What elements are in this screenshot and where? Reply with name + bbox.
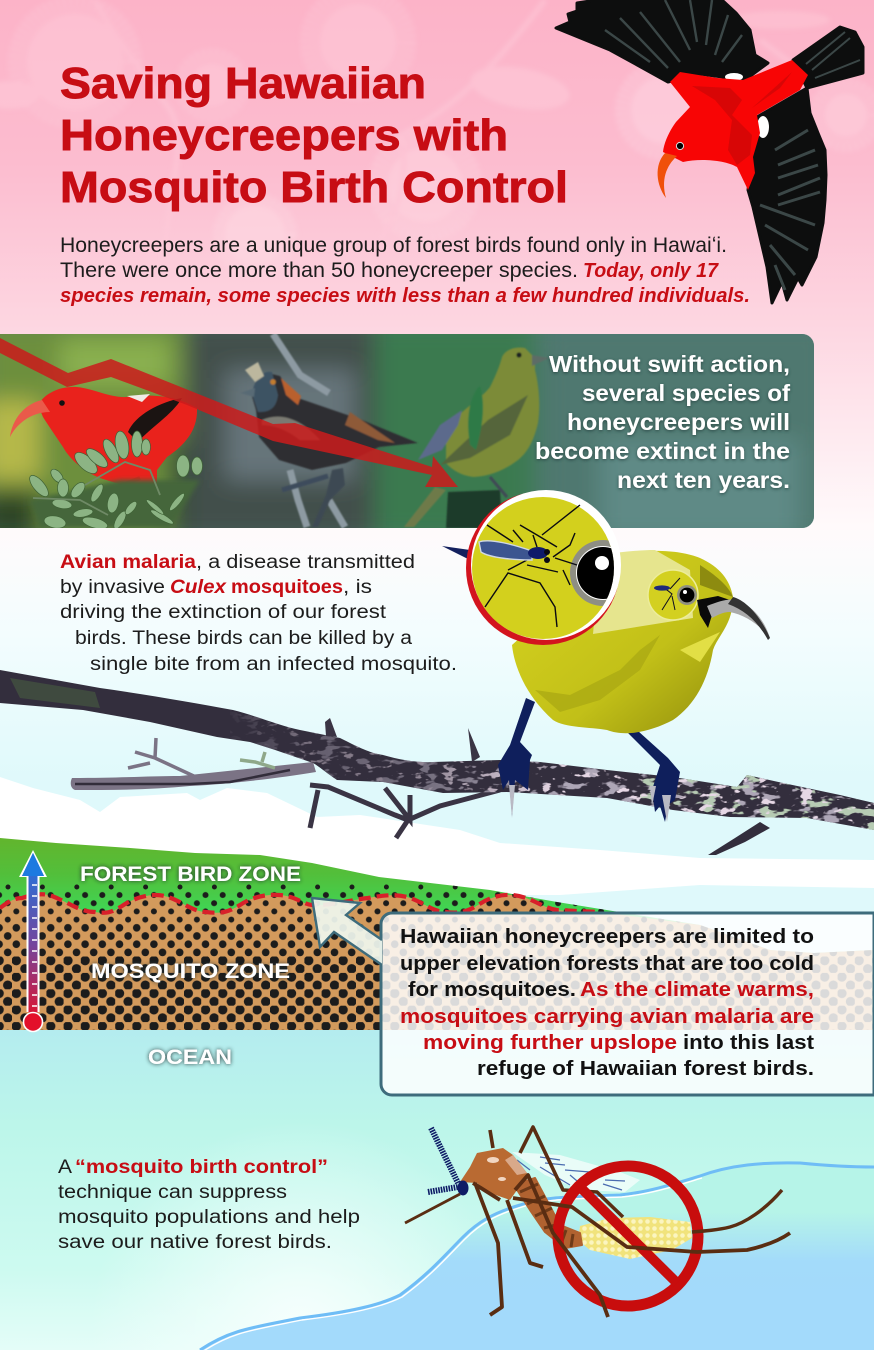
avian malaria text: , a disease transmitted <box>196 552 415 573</box>
avian malaria text <box>60 552 457 675</box>
photo panel: three honeycreepers with declining arrow <box>0 334 814 528</box>
photo: dark bird <box>240 362 418 527</box>
tail <box>442 546 470 560</box>
lower wing <box>748 88 826 303</box>
ocean <box>0 1030 874 1350</box>
abdomen <box>514 1178 582 1248</box>
red body <box>663 60 808 190</box>
head <box>458 1180 468 1196</box>
body <box>512 551 733 733</box>
feather shading <box>535 635 660 712</box>
deep water with wave line <box>200 1163 874 1350</box>
intro paragraph: Today, only 17 <box>583 260 719 282</box>
title <box>60 59 568 212</box>
panel text: extinction warning: Without swift action, <box>549 351 790 377</box>
avian malaria text: mosquitoes <box>231 577 343 598</box>
panel text: extinction warning: become extinct in the <box>535 438 790 464</box>
intro paragraph: species remain, some species with less than a few hundred individuals. <box>60 285 750 307</box>
tree branch <box>0 670 874 855</box>
declining arrow <box>0 338 458 487</box>
dashed mosquito line <box>0 894 600 913</box>
avian malaria text: Culex <box>170 577 228 598</box>
face mask and beak <box>697 596 735 628</box>
panel text: extinction warning: honeycreepers will <box>567 409 790 435</box>
legs <box>498 698 680 822</box>
birth control text: save our native forest birds. <box>58 1232 332 1253</box>
callout text: for mosquitoes. <box>408 979 576 1001</box>
far legs <box>490 1127 623 1217</box>
white wing patches <box>725 73 743 81</box>
photo: leaves <box>26 430 203 531</box>
callout text: mosquitoes carrying avian malaria are <box>400 1006 814 1028</box>
callout text: As the climate warms, <box>580 979 814 1001</box>
callout text: moving further upslope <box>423 1032 677 1054</box>
foam near coast <box>90 1120 510 1350</box>
wing <box>512 1152 640 1192</box>
halftone dots <box>0 887 874 1030</box>
inset magnifier circle <box>466 490 636 645</box>
title: Mosquito Birth Control <box>60 163 568 212</box>
callout text: upper elevation forests that are too cold <box>400 953 814 975</box>
zone labels: MOSQUITO ZONE <box>91 960 290 983</box>
eggs <box>578 1217 692 1259</box>
title: Honeycreepers with <box>60 111 508 160</box>
avian malaria text: single bite from an infected mosquito. <box>90 654 457 675</box>
near legs <box>473 1175 790 1317</box>
brown mosquito zone <box>0 890 874 1030</box>
prohibition sign <box>558 1166 698 1306</box>
birth control text: “mosquito birth control” <box>75 1157 328 1178</box>
birth control text: A <box>58 1157 72 1178</box>
icon: yellow honeycreeper <box>442 490 770 822</box>
zone labels: FOREST BIRD ZONE <box>80 863 301 886</box>
orange beak <box>658 153 677 198</box>
photo: red iiwi <box>10 386 198 484</box>
tail <box>793 27 863 88</box>
icon: flying iiwi bird <box>556 0 863 303</box>
callout box <box>312 898 874 1095</box>
zone labels <box>80 863 301 1069</box>
callout text <box>400 926 814 1080</box>
panel text: extinction warning: several species of <box>582 380 790 406</box>
callout text: into this last <box>683 1032 814 1054</box>
birth control text <box>58 1157 360 1253</box>
background: faint ohia flowers and leaves <box>0 0 874 271</box>
magnification beam <box>593 550 693 634</box>
intro paragraph: There were once more than 50 honeycreeper species. <box>60 259 578 282</box>
icon: mosquito with prohibition sign <box>405 1127 790 1317</box>
avian malaria text: driving the extinction of our forest <box>60 602 387 623</box>
avian malaria text: birds. These birds can be killed by a <box>75 628 412 649</box>
white cloud band <box>0 777 874 895</box>
birth control text: mosquito populations and help <box>58 1207 360 1228</box>
proboscis <box>405 1194 460 1223</box>
green forest zone <box>0 838 698 925</box>
inset mosquito <box>479 505 580 627</box>
thorax <box>460 1148 527 1200</box>
photo: grey branch <box>273 334 345 527</box>
callout arrow <box>312 898 382 965</box>
birth control text: technique can suppress <box>58 1182 287 1203</box>
small circle with mosquito <box>648 570 698 620</box>
title: Saving Hawaiian <box>60 59 426 108</box>
antennae <box>428 1128 458 1192</box>
zone labels: OCEAN <box>148 1046 232 1069</box>
avian malaria text: Avian malaria <box>60 552 196 573</box>
intro paragraph <box>60 234 750 307</box>
avian malaria text: by invasive <box>60 577 165 598</box>
callout text: refuge of Hawaiian forest birds. <box>477 1058 814 1080</box>
photo background blurs <box>0 334 814 528</box>
panel text: extinction warning <box>535 351 790 493</box>
panel text: extinction warning: next ten years. <box>617 467 790 493</box>
callout text: Hawaiian honeycreepers are limited to <box>400 926 814 948</box>
land cross-section <box>0 830 874 1030</box>
intro paragraph: Honeycreepers are a unique group of forest birds found only in Hawaiʻi. <box>60 234 727 257</box>
avian malaria text: , is <box>343 577 372 598</box>
eye <box>676 142 684 150</box>
photo: olive bird <box>404 347 549 528</box>
upper wing <box>556 0 768 82</box>
icon: thermometer arrow <box>19 850 47 1032</box>
